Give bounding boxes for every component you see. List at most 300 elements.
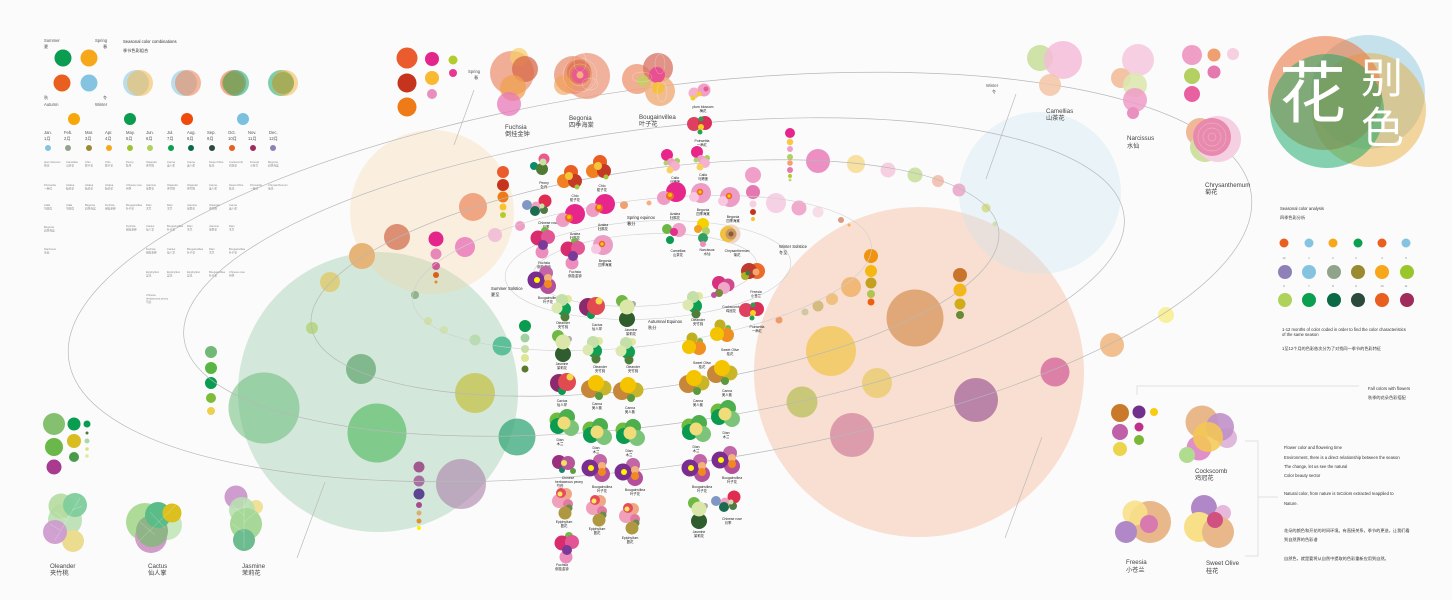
- flower: bougainvillea: 叶子花: [697, 488, 708, 493]
- month colour dots: [45, 145, 276, 151]
- month names: 6月: [146, 136, 153, 142]
- flower names by month: 一串红: [44, 186, 52, 190]
- winter palette: [1182, 45, 1239, 102]
- flower: cactus: Cactus: [592, 323, 602, 327]
- month names: 8月: [187, 136, 194, 142]
- flower: peony: Peony: [539, 181, 549, 185]
- flower names by month: 杜鹃花: [85, 186, 93, 190]
- flower names by month: 美人蕉: [187, 164, 195, 168]
- month numbers: 6: [1283, 284, 1285, 288]
- flower: dian: Dian: [626, 449, 632, 453]
- season labels: 冬: [103, 94, 107, 101]
- flower: chrysanthemum: [1186, 116, 1250, 196]
- flower: dian: 木兰: [593, 449, 600, 454]
- flower names by month: 叶子花: [209, 274, 217, 278]
- flower: bougainvillea: Bougainvillea: [592, 485, 612, 489]
- flower names by month: Bougainvillea: [167, 224, 183, 228]
- flower names by month: 木兰: [229, 228, 235, 232]
- chart: spring dots on orbits: [306, 166, 652, 334]
- flower: bougainvillea: Bougainvillea: [538, 296, 558, 300]
- solstice and equinox labels: Autumnal Equinox: [648, 319, 683, 324]
- flower: canna: Canna: [722, 389, 732, 393]
- spring label: Spring: [468, 69, 481, 74]
- flower names by month: 倒挂金钟: [105, 206, 116, 210]
- spring circle: [350, 130, 514, 294]
- flower: dian: [582, 418, 612, 454]
- flower: freesia: Freesia: [750, 290, 762, 294]
- flower names by month: 四季海棠: [85, 206, 96, 210]
- autumn palette: [1111, 404, 1158, 456]
- flower: azalea: 杜鹃花: [570, 235, 581, 240]
- flower: dian: [682, 415, 711, 453]
- flower: azalea: 杜鹃花: [598, 226, 609, 231]
- text block: flower color note: Color beauty sector: [1284, 473, 1321, 478]
- flower names by month: Calla: [66, 203, 73, 207]
- flower: calla: 马蹄莲: [698, 176, 709, 181]
- flower: epiphyllum: [619, 503, 640, 544]
- month names: 3月: [85, 136, 92, 142]
- season colour dots: [54, 50, 98, 92]
- flower names by month: 夹竹桃: [209, 206, 217, 210]
- flower: begonia: [554, 52, 610, 129]
- heading: fall colors: 秋季的花朵色彩搭配: [1368, 394, 1407, 401]
- season labels: Summer: [44, 38, 60, 43]
- flower names by month: Epiphyllum: [187, 270, 201, 274]
- flower: calla: [661, 149, 681, 184]
- flower: bougainvillea: 叶子花: [597, 488, 608, 493]
- flower: freesia: 小苍兰: [751, 293, 762, 298]
- flower names by month: Poinsettia: [250, 183, 262, 187]
- flower: dian: 木兰: [723, 434, 730, 439]
- flower: dian: Dian: [593, 446, 599, 450]
- flower: chinese rose: Chinese rose: [538, 221, 558, 225]
- month names: 10月: [228, 136, 237, 142]
- flower: fuchsia: [554, 532, 579, 571]
- flower names by month: Poinsettia: [44, 183, 56, 187]
- flower names by month: 月季: [229, 274, 235, 278]
- flower names by month: 栀子花: [85, 164, 93, 168]
- flower: narcissus: Narcissus: [1127, 135, 1154, 142]
- solstice and equinox labels: Winter Solstice: [779, 244, 808, 249]
- flower names by month: 马蹄莲: [66, 206, 74, 210]
- solstice and equinox labels: Spring equinox: [627, 215, 656, 220]
- flower: chio: [557, 165, 582, 202]
- season labels: 春: [103, 43, 108, 50]
- month names: Apr.: [105, 130, 112, 135]
- flower names by month: 茉莉花: [209, 228, 217, 232]
- flower: bougainvillea: 叶子花: [630, 491, 641, 496]
- flower names by month: 茉莉花: [146, 186, 154, 190]
- flower names by month: Canna: [187, 160, 195, 164]
- flower: chio: Chio: [572, 194, 578, 198]
- month names: 11月: [248, 136, 257, 142]
- text block: flower color note: Flower color and flowering time: [1284, 445, 1343, 450]
- month names: 7月: [167, 136, 174, 142]
- text block: flower color note: 花朵的颜色和开花的时间环境。有直接关系，季节的更迭，让我们看: [1284, 527, 1410, 534]
- month numbers: 7: [1308, 284, 1310, 288]
- flower names by month: 叶子花: [229, 250, 237, 254]
- flower: sweet olive: Sweet Olive: [721, 348, 739, 352]
- month numbers: 11: [1404, 284, 1408, 288]
- panel: small monthly flower clusters: [522, 84, 765, 571]
- flower: camellias: 山茶花: [673, 252, 684, 257]
- flower: poinsettia: [739, 302, 765, 333]
- flower names by month: Epiphyllum: [167, 270, 181, 274]
- flower names by month: 菊花: [268, 186, 274, 190]
- flower: bougainvillea: [582, 454, 612, 493]
- month numbers: 2: [1332, 256, 1334, 260]
- flower: fuchsia: 倒挂金钟: [537, 264, 551, 269]
- flower: bougainvillea: [682, 454, 712, 493]
- flower: sweet olive: [710, 320, 739, 356]
- heading: fall colors: Fall colors with flowers: [1368, 386, 1410, 391]
- flower names by month: 山茶花: [66, 164, 74, 168]
- season labels: Winter: [95, 102, 108, 107]
- flower names by month: Fuchsia: [126, 224, 136, 228]
- flower: bougainvillea: Bougainvillea: [625, 488, 645, 492]
- summer palette: [43, 413, 90, 474]
- flower: azalea: Azalea: [570, 232, 580, 236]
- flower names by month: Azalea: [66, 183, 75, 187]
- month names: Feb.: [64, 130, 72, 135]
- flower: calla: Calla: [671, 176, 679, 180]
- flower: jasmine: Jasmine: [242, 563, 266, 570]
- flower: poinsettia: Poinsettia: [695, 139, 709, 143]
- flower: fuchsia: [530, 227, 555, 269]
- flower names by month: Bougainvillea: [187, 247, 203, 251]
- flower: jasmine: 茉莉花: [557, 365, 568, 370]
- flower: chrysanthemum: Chrysanthemum: [1205, 182, 1250, 189]
- flower: cockscomb: [1179, 406, 1237, 482]
- flower: azalea: Azalea: [598, 223, 608, 227]
- flower names by month: 倒挂金钟: [146, 250, 157, 254]
- flower names by month: 叶子花: [167, 228, 175, 232]
- month names: 2月: [64, 136, 71, 142]
- flower: cockscomb: 鸡冠花: [1195, 474, 1214, 482]
- flower: chinese herbaceous peony: 芍药: [557, 483, 564, 488]
- text block: flower color note: 到自然界的色彩谱: [1284, 536, 1318, 543]
- flower names by month: Begonia: [85, 203, 95, 207]
- flower: chinese rose: [711, 490, 742, 525]
- flower: poinsettia: 一串红: [697, 142, 708, 147]
- flower names by month: 月季: [126, 186, 132, 190]
- flower: dian: 木兰: [626, 452, 633, 457]
- flower names by month: 杜鹃花: [66, 186, 74, 190]
- flower names by month: Fuchsia: [146, 247, 156, 251]
- flower names by month: 桂花: [229, 186, 235, 190]
- flower names by month: Sweet Olive: [229, 183, 244, 187]
- flower names by month: Dian: [209, 247, 215, 251]
- colour combination pairs: [123, 70, 298, 96]
- flower: calla: Calla: [699, 173, 707, 177]
- season labels: 秋: [44, 94, 49, 101]
- panel: background season circles: [238, 112, 1121, 537]
- flower: poinsettia: Poinsettia: [750, 325, 764, 329]
- flower names by month: Oleander: [146, 160, 157, 164]
- flower: fuchsia: 倒挂金钟: [568, 273, 582, 278]
- solstice and equinox labels: 秋分: [648, 324, 657, 331]
- flower names by month: Chio: [85, 160, 91, 164]
- flower: azalea: 杜鹃花: [670, 215, 681, 220]
- solstice and equinox labels: 夏至: [491, 292, 499, 297]
- flower names by month: 四季海棠: [44, 228, 55, 232]
- flower names by month: Azalea: [85, 183, 94, 187]
- flower: jasmine: 茉莉花: [626, 331, 637, 336]
- panel: autumn palette and flowers: [1111, 386, 1410, 575]
- flower names by month: 栀子花: [105, 164, 113, 168]
- month names: 4月: [105, 136, 112, 142]
- month names: Nov.: [248, 130, 256, 135]
- solstice and equinox labels: Summer Solstice: [491, 286, 523, 291]
- flower: begonia: [718, 187, 740, 223]
- flower names by month: 昙花: [187, 274, 193, 278]
- flower: canna: Canna: [693, 399, 703, 403]
- flower: sweet olive: [1184, 495, 1240, 575]
- flower names by month: 木兰: [209, 250, 215, 254]
- flower: epiphyllum: Epiphyllum: [589, 527, 605, 531]
- flower: oleander: 夹竹桃: [595, 368, 606, 373]
- flower: fuchsia: Fuchsia: [556, 563, 568, 567]
- flower names by month: Jasmine: [146, 183, 157, 187]
- flower: bougainvillea: 叶子花: [543, 299, 554, 304]
- flower: epiphyllum: Epiphyllum: [622, 536, 638, 540]
- chart: autumn dots on orbits: [776, 249, 1174, 457]
- flower: cockscomb: Cockscomb: [1195, 468, 1228, 475]
- flower: fuchsia: 倒挂金钟: [505, 130, 530, 138]
- flower: jasmine: [224, 486, 266, 577]
- flower: sweet olive: 桂花: [727, 351, 734, 356]
- flower names by month: Calla: [44, 203, 51, 207]
- flower: jasmine: [616, 295, 637, 336]
- panel: spring big flowers: [396, 48, 676, 138]
- month numbers: 3: [1355, 256, 1357, 260]
- description: 1-12 months of color coded in order to find the color characteristics: [1282, 327, 1406, 332]
- solstice and equinox labels: 冬至: [779, 249, 787, 256]
- flower names by month: Bougainvillea: [126, 203, 142, 207]
- flower: cactus: [550, 373, 576, 407]
- flower: camellias: 山茶花: [1046, 114, 1065, 122]
- title: 花别色: 花: [1279, 40, 1346, 137]
- month names: 9月: [207, 136, 214, 142]
- flower names by month: 叶子花: [126, 206, 134, 210]
- flower: narcissus: [1111, 44, 1154, 150]
- flower names by month: Canna: [229, 203, 237, 207]
- flower: begonia: [591, 235, 613, 267]
- flower names by month: 芍药: [146, 300, 152, 304]
- flower names by month: 夹竹桃: [187, 186, 195, 190]
- flower names by month: Chinese rose: [126, 183, 142, 187]
- flower names by month: 仙人掌: [146, 228, 154, 232]
- flower: cactus: [579, 297, 605, 331]
- winter label: 冬: [992, 88, 996, 95]
- flower names by month: 桂花: [209, 164, 215, 168]
- flower: fuchsia: Fuchsia: [505, 124, 527, 131]
- flower: sweet olive: Sweet Olive: [1206, 560, 1240, 567]
- flower: oleander: [616, 337, 641, 373]
- month names: Jan.: [44, 130, 52, 135]
- flower names by month: Cockscomb: [229, 160, 244, 164]
- flower: camellias: [662, 223, 686, 257]
- title: 花别色: 色: [1361, 94, 1404, 156]
- month names: 5月: [126, 136, 133, 142]
- month names: Aug.: [187, 130, 196, 135]
- flower names by month: Begonia: [44, 225, 54, 229]
- flower: epiphyllum: 昙花: [561, 523, 568, 528]
- flower names by month: Dian: [167, 203, 173, 207]
- month numbers: 9: [1355, 284, 1357, 288]
- flower: freesia: Freesia: [1126, 559, 1147, 566]
- flower: freesia: [1115, 500, 1171, 574]
- flower: cockscomb: Cockscomb: [722, 305, 740, 309]
- flower names by month: Peony: [126, 160, 134, 164]
- flower names by month: Canna: [209, 183, 217, 187]
- flower: canna: [613, 377, 644, 414]
- flower: chrysanthemum: [720, 224, 750, 257]
- heading: Seasonal color analysis: [1280, 206, 1324, 211]
- flower: canna: 美人蕉: [693, 402, 704, 407]
- flower names by month: Fuchsia: [105, 203, 115, 207]
- flower: dian: [710, 400, 740, 439]
- flower: cactus: 仙人掌: [592, 326, 603, 331]
- title: 花别色: [1268, 35, 1426, 168]
- flower: chinese herbaceous peony: [552, 455, 583, 488]
- solstice and equinox labels: [491, 215, 808, 331]
- flower: begonia: 四季海棠: [726, 218, 740, 223]
- month names: Mar.: [85, 130, 93, 135]
- flower: cactus: Cactus: [557, 399, 567, 403]
- flower: oleander: Oleander: [556, 321, 570, 325]
- chart: monthly colour table: [44, 113, 288, 304]
- flower names by month: 仙人掌: [167, 250, 175, 254]
- flower names by month: Chio: [105, 160, 111, 164]
- flower: bougainvillea: Bougainvillea: [639, 114, 676, 121]
- flower: dian: 木兰: [693, 448, 700, 453]
- flower: cockscomb: 鸡冠花: [726, 308, 737, 313]
- flower: bougainvillea: [712, 446, 742, 484]
- flower names by month: 昙花: [167, 274, 173, 278]
- flower: plum blossom: [688, 84, 714, 113]
- flower names by month: 木兰: [167, 206, 173, 210]
- colour grid: [1278, 238, 1414, 307]
- flower: jasmine: Jasmine: [625, 328, 637, 332]
- flower: canna: [707, 360, 738, 397]
- flower names by month: 木兰: [146, 206, 152, 210]
- flower: begonia: Begonia: [697, 208, 709, 212]
- flower names by month: 叶子花: [187, 250, 195, 254]
- flower names by month: 美人蕉: [209, 186, 217, 190]
- flower names by month: Oleander: [167, 183, 178, 187]
- flower: epiphyllum: Epiphyllum: [556, 520, 572, 524]
- flower names by month: 鸡冠花: [229, 164, 237, 168]
- flower: sweet olive: Sweet Olive: [693, 361, 711, 365]
- flower: dian: [550, 409, 579, 446]
- flower names by month: 茉莉花: [187, 206, 195, 210]
- flower: dian: 木兰: [557, 441, 564, 446]
- flower: chrysanthemum: 菊花: [1205, 188, 1217, 196]
- text block: flower color note: Nature.: [1284, 501, 1298, 506]
- heading: 四季色彩分析: [1280, 214, 1305, 221]
- flower: peony: [530, 154, 550, 189]
- text block: flower color note: 自然色，就是要将从自然中提取的色彩重新应用到自然。: [1284, 555, 1389, 562]
- flower: cockscomb: [711, 276, 740, 313]
- flower names by month: Azalea: [105, 183, 114, 187]
- flower: poinsettia: 一串红: [752, 328, 763, 333]
- flower: begonia: Begonia: [727, 215, 739, 219]
- flower: chio: Chio: [599, 184, 605, 188]
- month names: Sep.: [207, 130, 216, 135]
- flower: chio: [586, 155, 611, 192]
- flower names by month: 昙花: [146, 274, 152, 278]
- flower names by month: 木兰: [187, 228, 193, 232]
- flower: jasmine: [688, 497, 708, 538]
- flower: freesia: 小苍兰: [1126, 566, 1145, 574]
- month names: Jul.: [167, 130, 174, 135]
- flower: calla: [691, 146, 710, 181]
- flower names by month: Sweet Olive: [209, 160, 224, 164]
- month numbers: 1: [1308, 256, 1310, 260]
- panel: seasonal legend: [44, 38, 298, 107]
- flower: chrysanthemum: Chrysanthemum: [725, 249, 749, 253]
- panel: winter big flowers: [986, 41, 1250, 196]
- flower: bougainvillea: [614, 458, 645, 496]
- flower names by month: Chrysanthemum: [268, 183, 288, 187]
- flower: begonia: 四季海棠: [598, 262, 612, 267]
- flower: chinese rose: 月季: [725, 520, 732, 525]
- flower: bougainvillea: [622, 53, 676, 128]
- flower names by month: 水仙: [44, 250, 50, 254]
- flower: oleander: Oleander: [691, 318, 705, 322]
- flower: bougainvillea: Bougainvillea: [722, 476, 742, 480]
- flower: oleander: [682, 291, 706, 326]
- flower: calla: 马蹄莲: [670, 179, 681, 184]
- flower names by month: Jasmine: [209, 224, 220, 228]
- flower: bougainvillea: 叶子花: [639, 120, 658, 128]
- flower: azalea: [586, 194, 615, 231]
- flower: jasmine: Jasmine: [556, 362, 568, 366]
- flower: dian: Dian: [723, 431, 729, 435]
- flower: narcissus: [694, 218, 715, 256]
- flower: oleander: [582, 336, 608, 373]
- chart: winter dots on orbits: [745, 128, 998, 226]
- flower: camellias: [1027, 41, 1082, 122]
- flower names by month: 夹竹桃: [146, 164, 154, 168]
- flower: begonia: 四季海棠: [569, 121, 594, 129]
- winter label: Winter: [986, 83, 999, 88]
- flower: cactus: [126, 502, 182, 577]
- flower names by month: Dian: [229, 224, 235, 228]
- flower names by month: 夹竹桃: [167, 186, 175, 190]
- flower: canna: 美人蕉: [722, 392, 733, 397]
- flower: sweet olive: [682, 332, 711, 369]
- flower: narcissus: Narcissus: [700, 248, 714, 252]
- flower: oleander: 夹竹桃: [50, 569, 69, 577]
- month names: May.: [126, 130, 135, 135]
- flower names by month: plum blossom: [44, 160, 61, 164]
- flower: poinsettia: [687, 116, 712, 147]
- flower: oleander: 夹竹桃: [628, 368, 639, 373]
- flower: chio: 栀子花: [570, 197, 581, 202]
- flower names by month: Jasmine: [187, 203, 198, 207]
- month names: Dec.: [269, 130, 278, 135]
- month numbers: 8: [1332, 284, 1334, 288]
- panel: seasonal color analysis: [1278, 206, 1414, 352]
- season labels: Autumn: [44, 102, 59, 107]
- season labels: Spring: [95, 38, 108, 43]
- flower: begonia: [689, 183, 711, 216]
- flower: dian: Dian: [557, 438, 563, 442]
- flower: cactus: Cactus: [148, 563, 167, 570]
- flower: freesia: [741, 263, 765, 298]
